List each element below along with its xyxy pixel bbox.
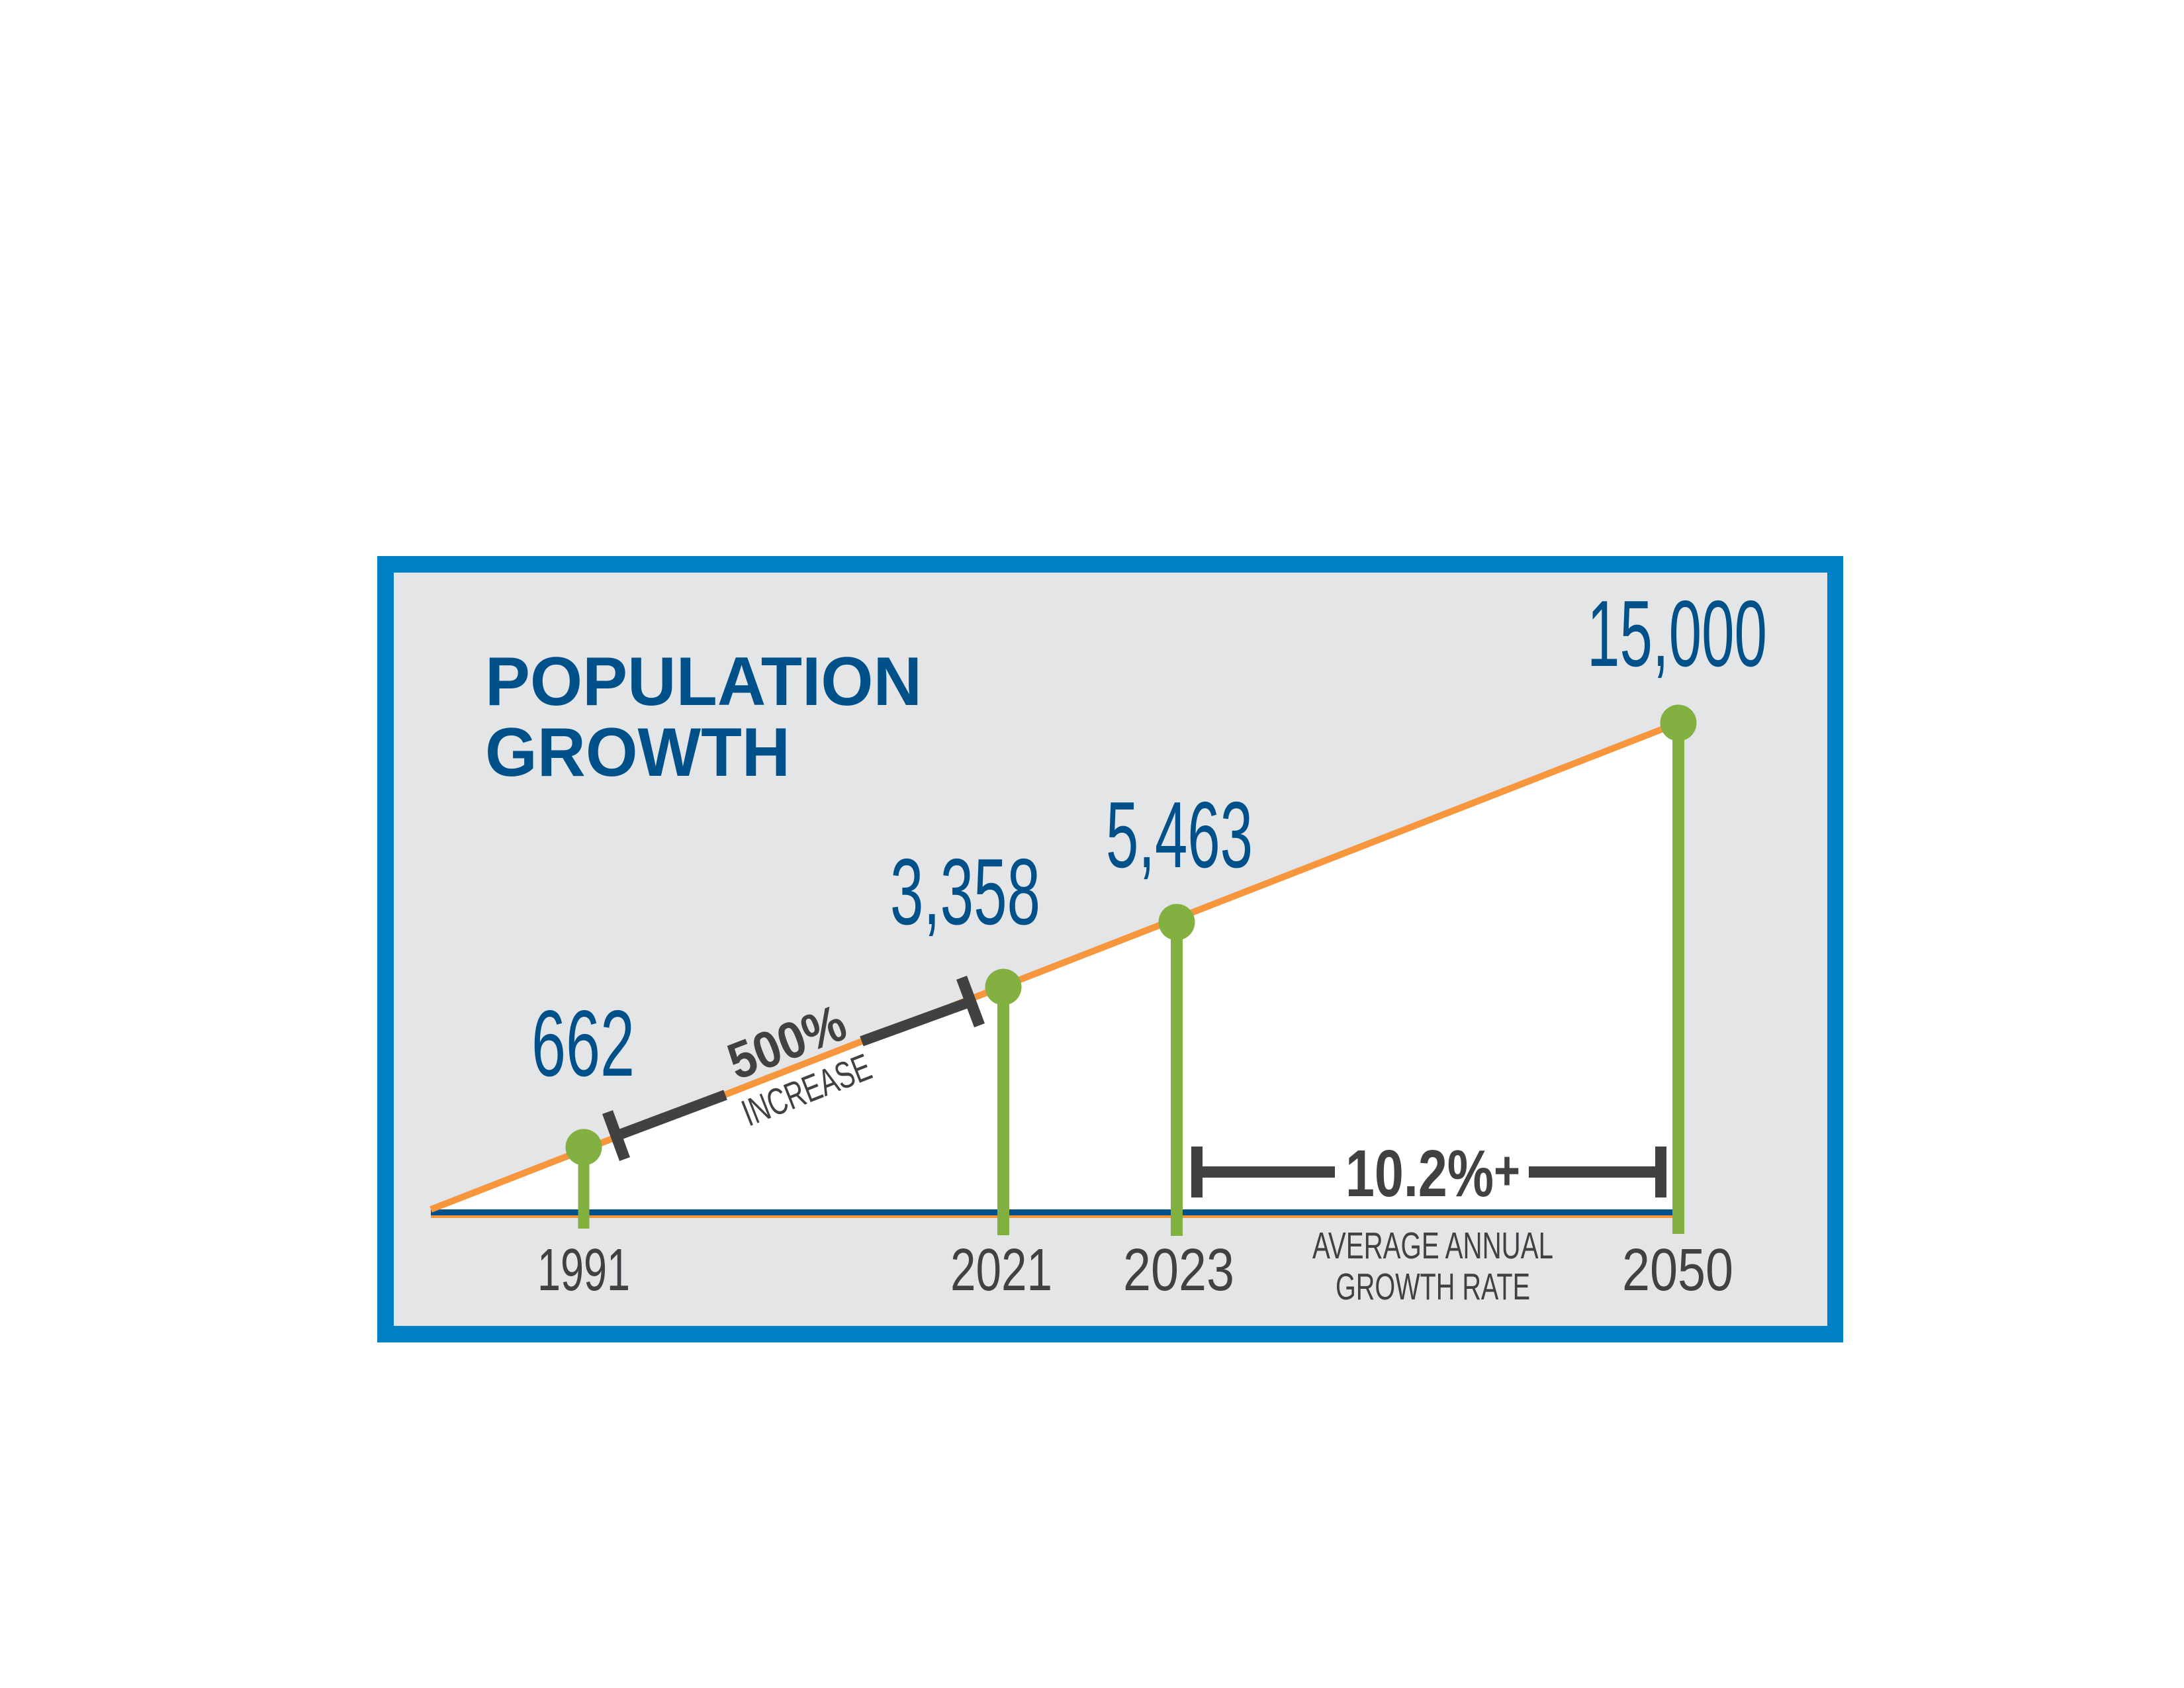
value: 15,000: 15,000 (1587, 581, 1767, 686)
label: INCREASE: INCREASE (736, 1046, 878, 1135)
label: 500%: 500% (720, 993, 854, 1091)
year: 2021: 2021 (950, 1237, 1052, 1303)
marker: 2021 (985, 969, 1022, 1235)
year: 2050: 2050 (1622, 1237, 1733, 1303)
marker: 1991 (565, 1129, 602, 1229)
value: 5,463: 5,463 (1106, 782, 1253, 888)
value: 3,358: 3,358 (890, 839, 1040, 945)
label: average annual growth rate: GROWTH RATE (1336, 1266, 1530, 1308)
value: 662: 662 (531, 991, 635, 1096)
label: 10.2%+: + (1494, 1139, 1520, 1201)
bracket: 500% increase span (608, 978, 979, 1159)
baseline axis (431, 1209, 1678, 1218)
label: average annual growth rate (1312, 1225, 1553, 1308)
marker: 2050 (1660, 704, 1697, 1234)
title: GROWTH (485, 714, 790, 791)
year: 1991: 1991 (537, 1237, 630, 1303)
label: average annual growth rate: AVERAGE ANNUAL (1312, 1225, 1553, 1267)
bracket: growth rate span (1191, 1147, 1666, 1197)
title: POPULATION (485, 643, 922, 720)
chart area: white triangle under growth line (431, 723, 1678, 1209)
panel: framed chart background (377, 556, 1843, 1342)
label: 10.2%+: 10.2% (1345, 1137, 1494, 1211)
year: 2023: 2023 (1123, 1237, 1234, 1303)
growth line (431, 723, 1678, 1209)
title (485, 643, 922, 791)
marker: 2023 (1158, 904, 1195, 1236)
